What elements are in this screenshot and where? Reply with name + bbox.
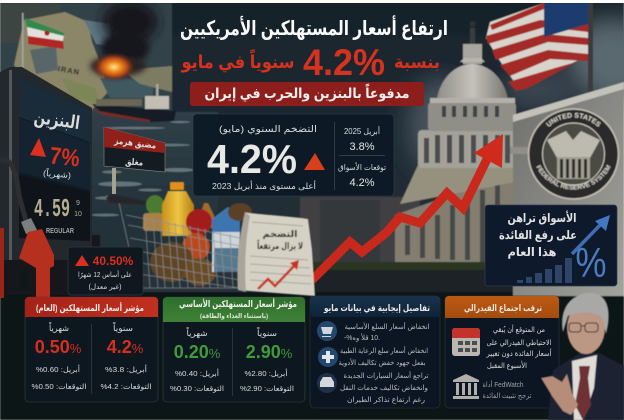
item: medical care: بفعل جهود خفض تكاليف الأدوية	[338, 358, 426, 367]
Federal Reserve building	[510, 82, 624, 297]
title: سنوياً في مايو	[181, 49, 294, 73]
annual column: 2.90%	[246, 342, 293, 362]
icon: oil bottle	[162, 182, 194, 236]
label: Iran: IRAN	[57, 64, 81, 77]
title: ارتفاع أسعار المستهلكين الأمريكيين	[180, 14, 448, 40]
Federal Reserve seal: FEDERAL RESERVE SYSTEM	[536, 164, 612, 190]
Fed chair portrait	[541, 293, 624, 420]
FedWatch note	[482, 380, 532, 400]
price display: 9	[76, 200, 80, 207]
monthly column: أبريل: 0.40%	[175, 368, 219, 378]
item: medical care: انخفاض أسعار سلع الرعاية الطبية	[340, 346, 428, 355]
American flag	[486, 3, 593, 95]
hormuz sign	[104, 127, 165, 194]
map of Iran	[0, 3, 172, 113]
item: cars: رغم ارتفاع تذاكر الطيران	[347, 396, 425, 404]
details heading: تفاصيل إيجابية في بيانات مايو	[323, 303, 430, 314]
monthly column: التوقعات: 0.30%	[170, 384, 224, 393]
ground, grass and road	[0, 235, 624, 420]
Fed text: من المتوقع أن يُبقي	[493, 324, 545, 334]
smoke and explosion	[90, 0, 158, 82]
hormuz sign: مغلق	[125, 157, 143, 168]
headline CPI heading: مؤشر أسعار المستهلكين (العام)	[36, 302, 144, 314]
callout: 40.50 percent	[68, 247, 143, 295]
april 2025 stat: أبريل 2025	[344, 126, 380, 136]
top white strip	[0, 0, 624, 3]
monthly column: أبريل: 0.60%	[36, 364, 80, 374]
hose and nozzle	[0, 160, 54, 298]
panel: Fed meeting	[445, 296, 559, 408]
icon: calendar	[452, 328, 480, 356]
title: 4.2%	[303, 42, 385, 83]
Fed text	[486, 324, 552, 370]
Fed text: أسعار الفائدة دون تغيير	[486, 348, 552, 358]
monthly column: التوقعات: 0.50%	[32, 382, 86, 391]
annual column	[100, 321, 152, 391]
annual note: أعلى مستوى منذ أبريل 2023	[212, 180, 316, 191]
annual column: سنوياً	[112, 321, 133, 333]
icon: milk carton	[212, 207, 240, 272]
Fed heading: ترقب اجتماع الفيدرالي	[464, 303, 542, 314]
subtitle pill: مدفوعاً بالبنزين والحرب في إيران	[204, 83, 410, 102]
annual column: التوقعات: 4.2%	[100, 382, 152, 391]
price display	[34, 194, 82, 235]
item: medical care	[318, 346, 428, 367]
price display: 4.59	[34, 194, 70, 224]
panel: markets bet	[485, 205, 617, 286]
annual column: 4.2%	[107, 337, 144, 357]
price display: REGULAR	[46, 228, 74, 235]
monthly 7 percent	[30, 138, 81, 180]
monthly column	[32, 321, 86, 391]
sea	[88, 112, 218, 262]
panel: markets bet: هذا العام	[508, 245, 556, 260]
FedWatch note: ترجح تثبيت الفائدة	[482, 393, 532, 400]
april 2025 stat: 3.8%	[349, 141, 375, 153]
item: commodities: .10 قلأ وه%-	[344, 333, 380, 342]
panel: markets bet: على رفع الفائدة	[499, 228, 577, 242]
price display: 10	[74, 211, 82, 218]
icon: bank	[453, 374, 479, 399]
Fed text: الأسبوع المقبل	[487, 360, 527, 370]
panel: headline CPI	[25, 297, 158, 402]
ship	[92, 84, 176, 122]
annual value: 4.2%	[207, 136, 297, 182]
monthly column: شهرياً	[186, 326, 208, 338]
monthly column: شهرياً	[48, 321, 69, 333]
callout: 40.50 percent: (غير معدل)	[88, 284, 122, 291]
title	[180, 14, 448, 83]
receipt: لا يزال مرتفعاً	[256, 239, 303, 252]
big red rising arrow	[312, 134, 503, 280]
panel: markets bet: الأسواق تراهن	[508, 210, 576, 226]
gas pump	[0, 67, 92, 298]
item: cars: تراجع أسعار السيارات الجديدة	[344, 371, 429, 380]
receipt mini arrow	[258, 260, 299, 289]
annual column: أبريل: 3.8%	[105, 364, 147, 374]
FedWatch note: FedWatch أداة	[482, 380, 524, 389]
item: commodities	[317, 321, 430, 342]
Federal Reserve seal: UNITED STATES	[545, 112, 602, 128]
market expectations stat: 4.2%	[349, 177, 375, 189]
monthly column	[170, 326, 224, 393]
receipt text: التضخم	[262, 229, 298, 240]
annual column: سنوياً	[256, 326, 277, 338]
Fed text: الاحتياطي الفيدرالي على	[486, 338, 552, 347]
annual column: التوقعات: 2.90%	[240, 384, 294, 393]
Federal Reserve seal	[527, 108, 620, 200]
callout: 40.50 percent: على أساس 12 شهرًا	[78, 270, 132, 279]
market expectations stat: توقعات الأسواق	[338, 162, 386, 172]
item: cars	[317, 371, 429, 404]
annual column	[240, 326, 294, 393]
monthly column: 0.20%	[174, 342, 221, 362]
monthly column: 0.50%	[35, 337, 82, 357]
panel: positive details	[310, 296, 440, 408]
shopping cart with groceries	[106, 182, 252, 288]
panel: core CPI	[163, 297, 305, 402]
title: بنسبة	[394, 52, 440, 72]
core CPI heading: مؤشر أسعار المستهلكين الأساسي	[179, 298, 297, 310]
item: cars: وانخفاض تكاليف خدمات النقل	[340, 384, 428, 392]
panel: core CPI: (باستثناء الغذاء والطاقة)	[200, 313, 268, 320]
Capitol building	[300, 21, 516, 275]
monthly 7 percent: 7%	[48, 142, 81, 172]
receipt	[237, 212, 315, 296]
annual heading: التضخم السنوي (مايو)	[219, 124, 317, 135]
april 2025 stat	[344, 126, 380, 153]
item: commodities: انخفاض أسعار السلع الأساسية	[344, 322, 430, 331]
pump heading: البنزين	[33, 107, 81, 134]
annual column: أبريل: 2.80%	[245, 368, 288, 378]
callout: 40.50 percent: 40.50%	[93, 254, 134, 268]
icon: up triangle	[304, 153, 325, 170]
panel: annual inflation	[193, 114, 394, 196]
flag of Iran	[22, 13, 64, 73]
chart: rising bars with percent: %	[576, 239, 606, 286]
subtitle pill	[190, 82, 424, 106]
hormuz sign: مضيق هرمز	[113, 135, 157, 152]
monthly 7 percent: (شهرياً)	[43, 167, 72, 180]
market expectations stat	[338, 162, 386, 189]
